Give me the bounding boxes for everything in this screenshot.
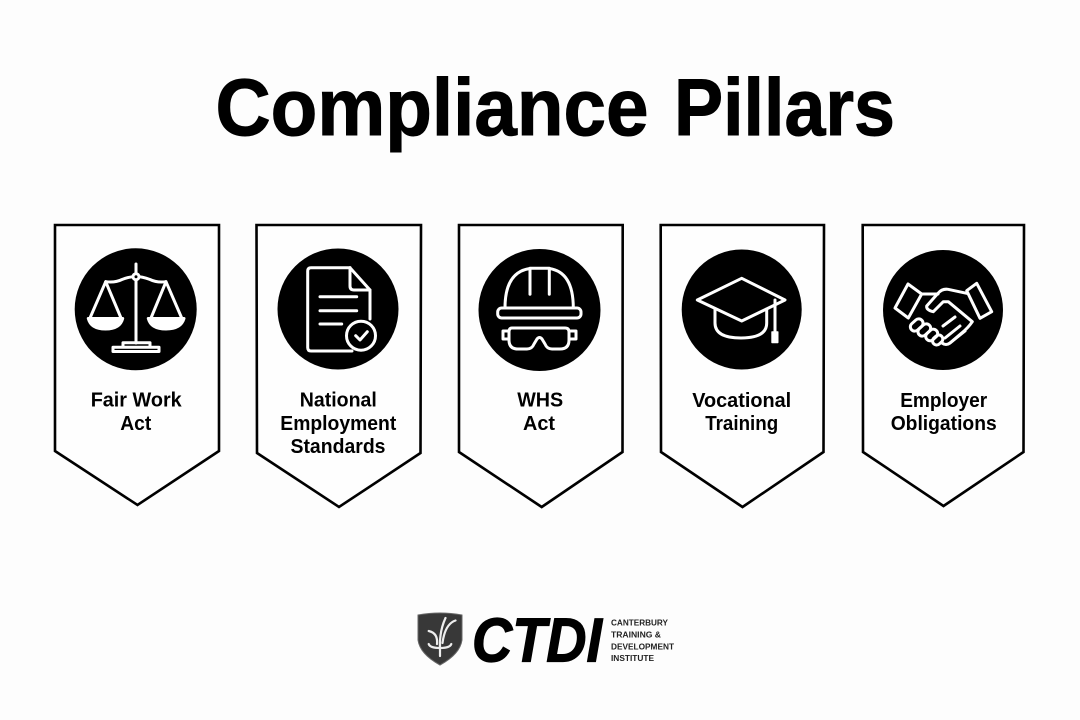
label: Vocational Training xyxy=(692,390,791,435)
label: Fair Work Act: Act xyxy=(120,413,152,435)
icon: hard hat and goggles xyxy=(498,268,581,349)
icon: handshake xyxy=(895,283,992,347)
icon: shield crest xyxy=(418,613,462,665)
label: National Employment Standards: National xyxy=(300,390,377,412)
label: National Employment Standards: Employment xyxy=(280,413,397,435)
institute name: DEVELOPMENT xyxy=(611,642,675,652)
label: WHS Act xyxy=(517,390,563,435)
panel: WHS Act xyxy=(459,225,623,507)
title xyxy=(216,63,895,153)
panel: Vocational Training xyxy=(661,225,824,507)
institute name: INSTITUTE xyxy=(611,653,654,663)
institute name: CANTERBURY xyxy=(611,618,668,628)
label: Employer Obligations: Obligations xyxy=(891,413,997,435)
panel: Employer Obligations xyxy=(863,225,1024,506)
label: Employer Obligations xyxy=(891,390,997,435)
institute name: TRAINING & xyxy=(611,630,661,640)
label: Employer Obligations: Employer xyxy=(900,390,987,412)
label: Fair Work Act: Fair Work xyxy=(91,390,183,412)
label: WHS Act: WHS xyxy=(517,390,563,412)
panel: National Employment Standards xyxy=(256,225,421,507)
title: Pillars xyxy=(674,63,895,153)
logo wordmark: CTDI xyxy=(472,606,604,676)
icon: document with check xyxy=(308,268,376,351)
label: Vocational Training: Vocational xyxy=(692,390,791,412)
label: Vocational Training: Training xyxy=(705,413,778,435)
footer logo xyxy=(418,606,675,676)
label: National Employment Standards: Standards xyxy=(290,436,386,458)
title: Compliance xyxy=(216,63,648,153)
label: National Employment Standards xyxy=(280,390,397,458)
label: WHS Act: Act xyxy=(523,413,555,435)
icon: graduation cap xyxy=(697,278,785,342)
icon: scales of justice xyxy=(88,264,184,352)
panel: Fair Work Act xyxy=(55,225,219,505)
institute name xyxy=(611,618,675,663)
label: Fair Work Act xyxy=(91,390,183,435)
